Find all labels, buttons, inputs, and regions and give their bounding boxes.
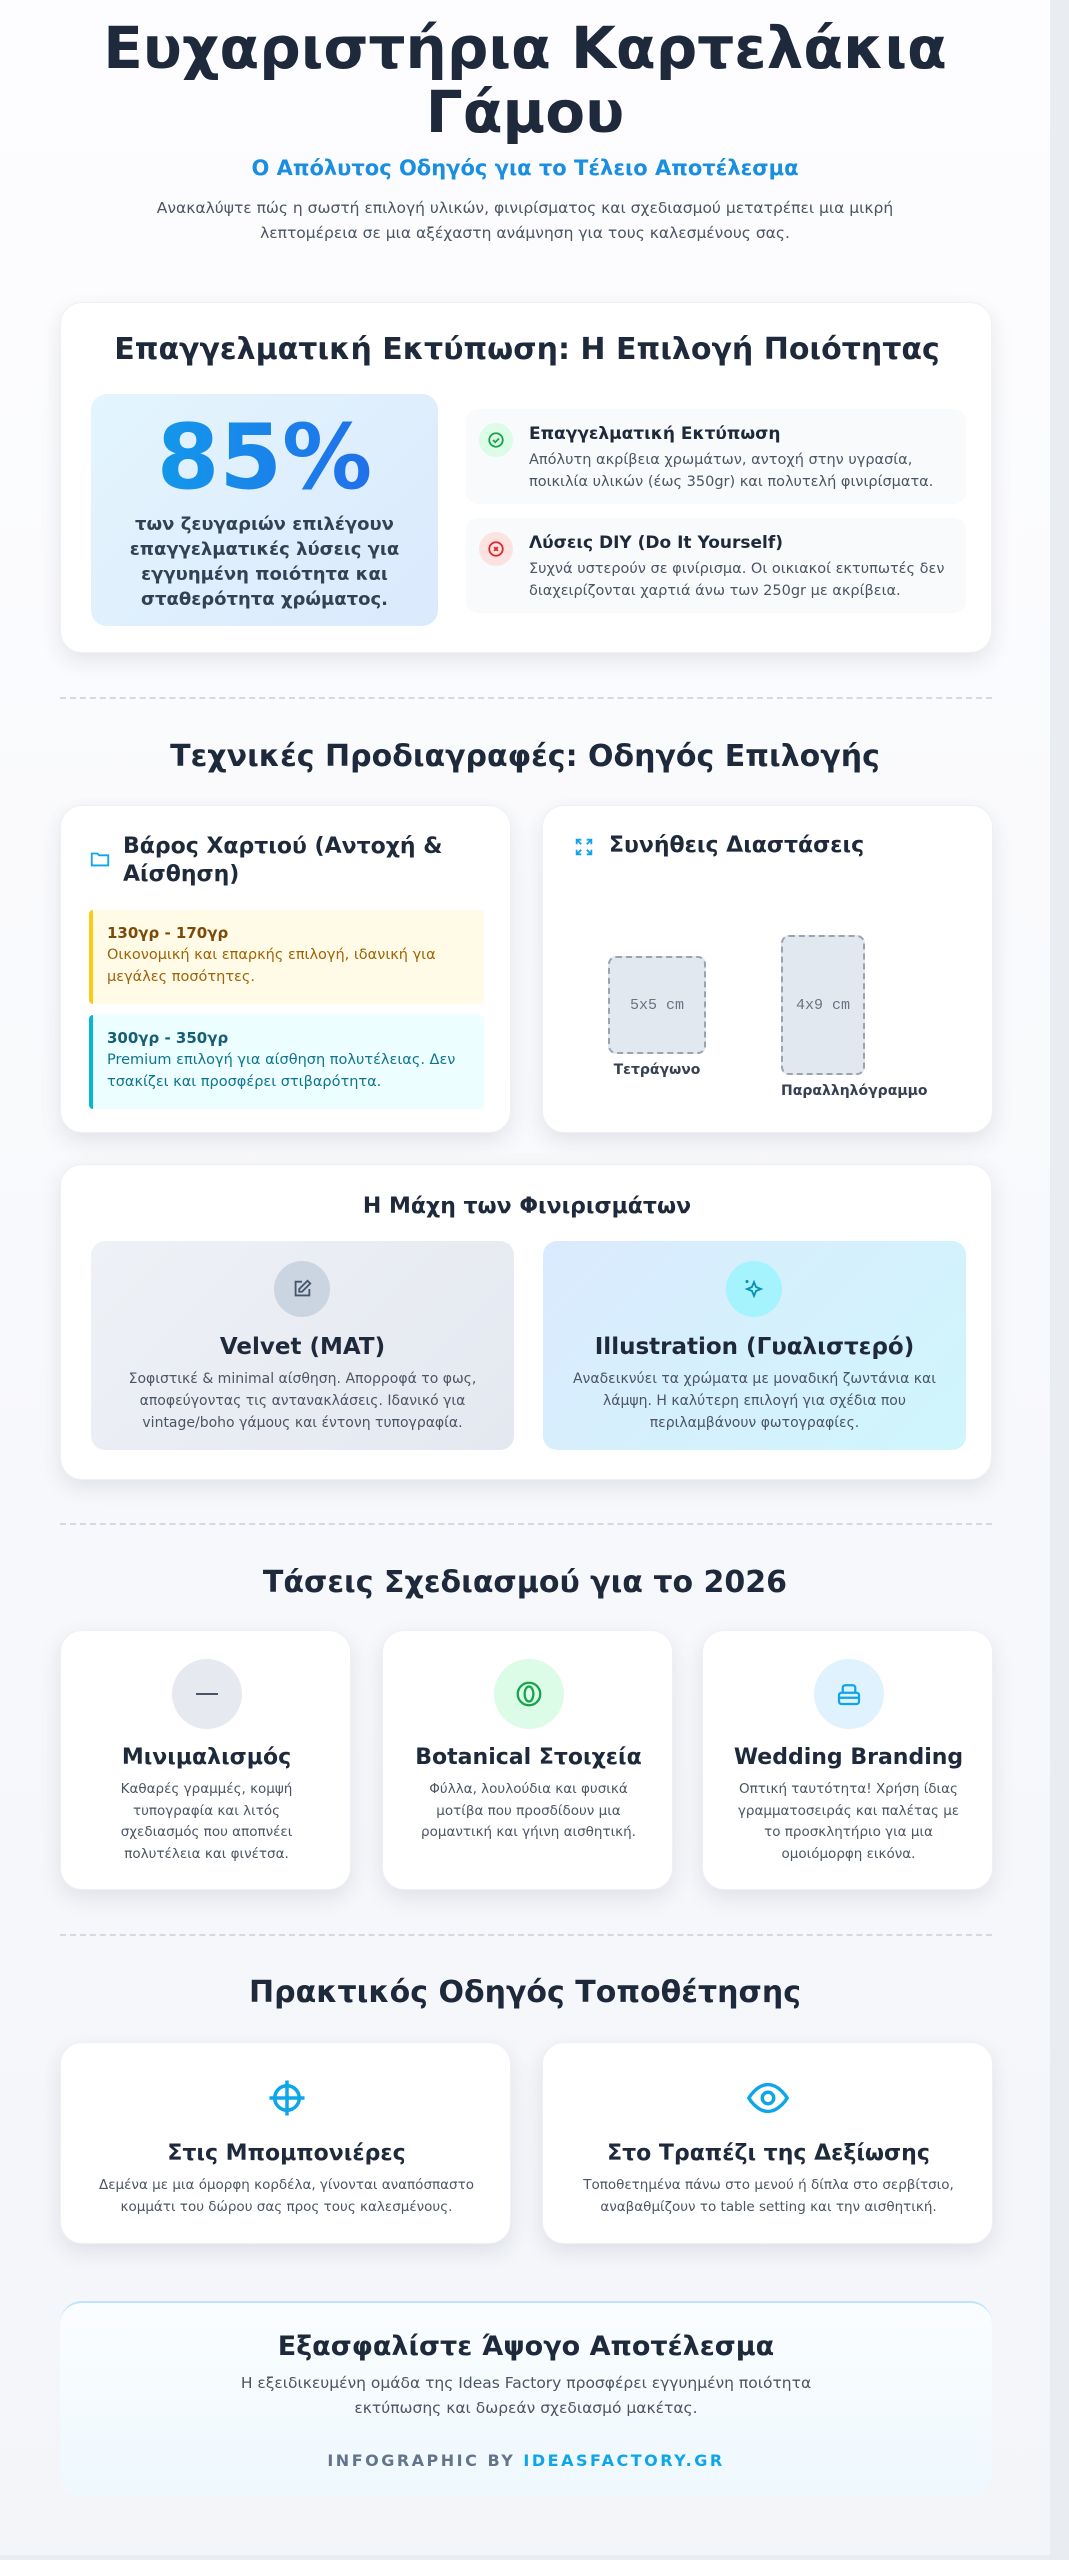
placement: bomboniere: Δεμένα με μια όμορφη κορδέλα, γίνονται αναπόσπαστο κομμάτι του δώρου σας προς τους καλεσμένους.: [99, 2177, 474, 2214]
finish: illustration: Illustration (Γυαλιστερό): [595, 1334, 914, 1360]
weight 130-170: Οικονομική και επαρκής επιλογή, ιδανική για μεγάλες ποσότητες.: [107, 947, 436, 985]
finish: velvet: Velvet (MAT): [220, 1334, 385, 1360]
panel: finishes: [60, 1164, 992, 1480]
item: DIY: Λύσεις DIY (Do It Yourself): [529, 533, 783, 553]
trend: minimalism: [60, 1630, 351, 1890]
section heading: trends: Τάσεις Σχεδιασμού για το 2026: [263, 1565, 787, 1600]
item: professional: Επαγγελματική Εκτύπωση: [529, 424, 780, 444]
item: professional: Απόλυτη ακρίβεια χρωμάτων, αντοχή στην υγρασία, ποικιλία υλικών (έως 350gr) και πολυτελή φινιρίσματα.: [529, 452, 933, 490]
trend: botanical: Φύλλα, λουλούδια και φυσικά μοτίβα που προσδίδουν μια ρομαντική και γήινη αισθητική.: [421, 1781, 636, 1840]
callout: CTA: Εξασφαλίστε Άψογο Αποτέλεσμα: [278, 2331, 774, 2362]
subtitle: Ο Απόλυτος Οδηγός για το Τέλειο Αποτέλεσμα: [251, 156, 799, 180]
stat box 85%: των ζευγαριών επιλέγουν επαγγελματικές λύσεις για εγγυημένη ποιότητα και σταθερότητα χρώματος.: [130, 514, 399, 610]
section heading: specs: Τεχνικές Προδιαγραφές: Οδηγός Επιλογής: [170, 739, 880, 774]
weight 130-170: 130γρ - 170γρ: [107, 924, 228, 942]
finish: illustration: [543, 1241, 966, 1450]
finish: velvet: Σοφιστικέ & minimal αίσθηση. Απορροφά το φως, αποφεύγοντας τις αντανακλάσεις. Ιδανικό για vintage/boho γάμους και έντονη τυπογραφία.: [129, 1371, 476, 1431]
placement: bomboniere: [60, 2042, 511, 2244]
size: square: 5x5 cm: [630, 996, 684, 1014]
panel: paper weight: Βάρος Χαρτιού (Αντοχή & Αίσθηση): [123, 834, 442, 887]
placement: table: Τοποθετημένα πάνω στο μενού ή δίπλα στο σερβίτσιο, αναβαθμίζουν το table setting και την αισθητική.: [583, 2177, 954, 2214]
icon: expand: [576, 838, 592, 856]
size: rectangle: 4x9 cm: [796, 996, 850, 1014]
weight 300-350: 300γρ - 350γρ: [107, 1029, 228, 1047]
icon: check: [479, 423, 513, 457]
trend: branding: Οπτική ταυτότητα! Χρήση ίδιας γραμματοσειράς και παλέτας με το προσκλητήριο για μια ομοιόμορφη εικόνα.: [738, 1781, 959, 1862]
weight 130-170: [89, 910, 484, 1004]
finish: velvet: [91, 1241, 514, 1450]
panel: paper weight: [60, 805, 511, 1133]
trend: minimalism: Μινιμαλισμός: [122, 1745, 291, 1770]
weight 300-350: Premium επιλογή για αίσθηση πολυτέλειας. Δεν τσακίζει και προσφέρει στιβαρότητα.: [107, 1052, 455, 1090]
panel: professional printing: [60, 302, 992, 653]
section heading: placement: Πρακτικός Οδηγός Τοποθέτησης: [249, 1975, 801, 2010]
placement: table: [542, 2042, 993, 2244]
weight 300-350: [89, 1015, 484, 1109]
item: DIY: Συχνά υστερούν σε φινίρισμα. Οι οικιακοί εκτυπωτές δεν διαχειρίζονται χαρτιά άνω των 250gr με ακρίβεια.: [529, 561, 944, 599]
trend: botanical: Botanical Στοιχεία: [415, 1745, 642, 1770]
trend: branding: [702, 1630, 993, 1890]
item: DIY: [466, 518, 966, 613]
finish: illustration: Αναδεικνύει τα χρώματα με μοναδική ζωντάνια και λάμψη. Η καλύτερη επιλογή για σχέδια που περιλαμβάνουν φωτογραφίες.: [573, 1371, 936, 1431]
intro text: Ανακαλύψτε πώς η σωστή επιλογή υλικών, φινιρίσματος και σχεδιασμού μετατρέπει μια μικρή λεπτομέρεια σε μια αξέχαστη ανάμνηση για τους καλεσμένους σας.: [157, 199, 893, 242]
title: [103, 14, 947, 146]
stat box 85%: [91, 394, 438, 626]
callout: CTA: [60, 2301, 992, 2497]
placement: bomboniere: Στις Μπομπονιέρες: [167, 2141, 406, 2166]
panel: sizes: Συνήθεις Διαστάσεις: [609, 833, 864, 858]
panel: finishes: Η Μάχη των Φινιρισμάτων: [363, 1194, 691, 1219]
title: Ευχαριστήρια Καρτελάκια: [103, 14, 947, 82]
callout: CTA: INFOGRAPHIC BY IDEASFACTORY.GR: [327, 2451, 725, 2470]
panel heading: Επαγγελματική Εκτύπωση: Η Επιλογή Ποιότητας: [114, 332, 940, 367]
size: square: [608, 956, 706, 1054]
panel: sizes: [542, 805, 993, 1133]
title: Γάμου: [426, 78, 624, 146]
item: professional: [466, 409, 966, 504]
panel: sizes: Παραλληλόγραμμο: [781, 1083, 928, 1099]
trend: branding: Wedding Branding: [734, 1745, 963, 1770]
icon: folder: [90, 852, 110, 866]
size: rectangle: [781, 935, 865, 1075]
panel: sizes: Τετράγωνο: [614, 1062, 700, 1078]
trend: minimalism: Καθαρές γραμμές, κομψή τυπογραφία και λιτός σχεδιασμός που αποπνέει πολυτέλεια και φινέτσα.: [121, 1781, 292, 1862]
stat box 85%: 85%: [157, 405, 372, 510]
icon: x: [479, 532, 513, 566]
placement: table: Στο Τραπέζι της Δεξίωσης: [607, 2141, 930, 2166]
callout: CTA: Η εξειδικευμένη ομάδα της Ideas Factory προσφέρει εγγυημένη ποιότητα εκτύπωσης και δωρεάν σχεδιασμό μακέτας.: [241, 2374, 811, 2417]
trend: botanical: [382, 1630, 673, 1890]
